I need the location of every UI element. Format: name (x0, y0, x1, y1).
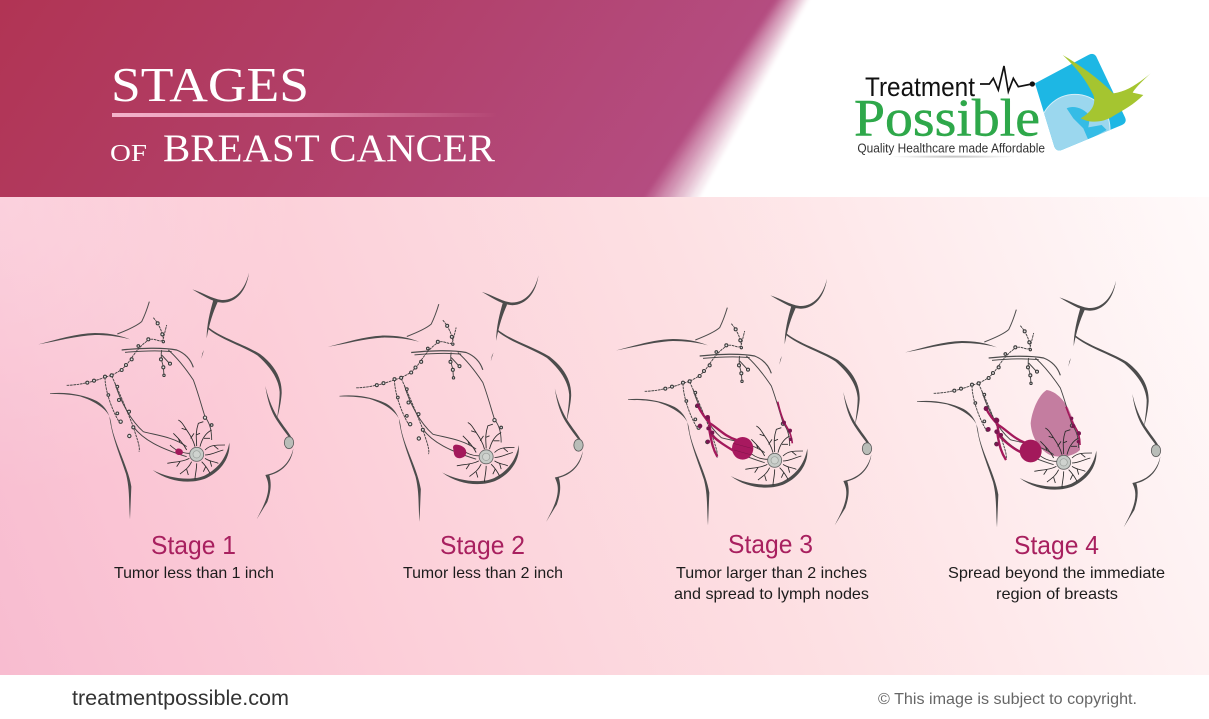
stage 4 description: region of breasts (996, 586, 1118, 603)
logo heartbeat line (980, 66, 1035, 92)
panel: stage 2 (328, 275, 583, 582)
panel: stage 3 (616, 279, 872, 603)
panel: stage 4 (905, 281, 1165, 603)
stage 2 description: Tumor less than 2 inch (403, 565, 563, 582)
logo: Treatment Possible: Quality Healthcare made Affordable (857, 142, 1045, 156)
header banner (0, 0, 808, 197)
main background (0, 197, 1209, 675)
title: OF (110, 141, 147, 167)
stage 2 heading: Stage 2 (440, 530, 525, 560)
logo: Treatment Possible: Possible (854, 89, 1040, 147)
copyright note: © This image is subject to copyright. (878, 691, 1137, 708)
stage 3 description: Tumor larger than 2 inches (676, 565, 867, 582)
stage 4 heading: Stage 4 (1014, 530, 1099, 560)
stage 1 heading: Stage 1 (151, 530, 236, 560)
title (110, 57, 497, 170)
illustration: stage 2 (328, 275, 583, 522)
panel: stage 1 (38, 273, 294, 582)
stage 3 description: and spread to lymph nodes (674, 586, 869, 603)
stage 3 heading: Stage 3 (728, 529, 813, 559)
stage 1 description: Tumor less than 1 inch (114, 565, 274, 582)
website address: treatmentpossible.com (72, 687, 289, 710)
illustration: stage 4 (905, 281, 1161, 527)
stage 4 description: Spread beyond the immediate (948, 565, 1165, 582)
logo: Treatment Possible (854, 54, 1151, 164)
logo: Treatment Possible: Treatment (865, 72, 976, 102)
stage 3 tumor and lymph spread (696, 402, 792, 460)
footer (0, 675, 1209, 719)
logo mark: globe and bird (1035, 54, 1150, 150)
illustration: stage 3 (616, 279, 872, 525)
title: BREAST CANCER (163, 127, 495, 170)
stage 4 tumor and lymph spread (984, 406, 1081, 462)
title line: stages: STAGES (111, 57, 309, 112)
illustration: stage 1 (38, 273, 294, 519)
